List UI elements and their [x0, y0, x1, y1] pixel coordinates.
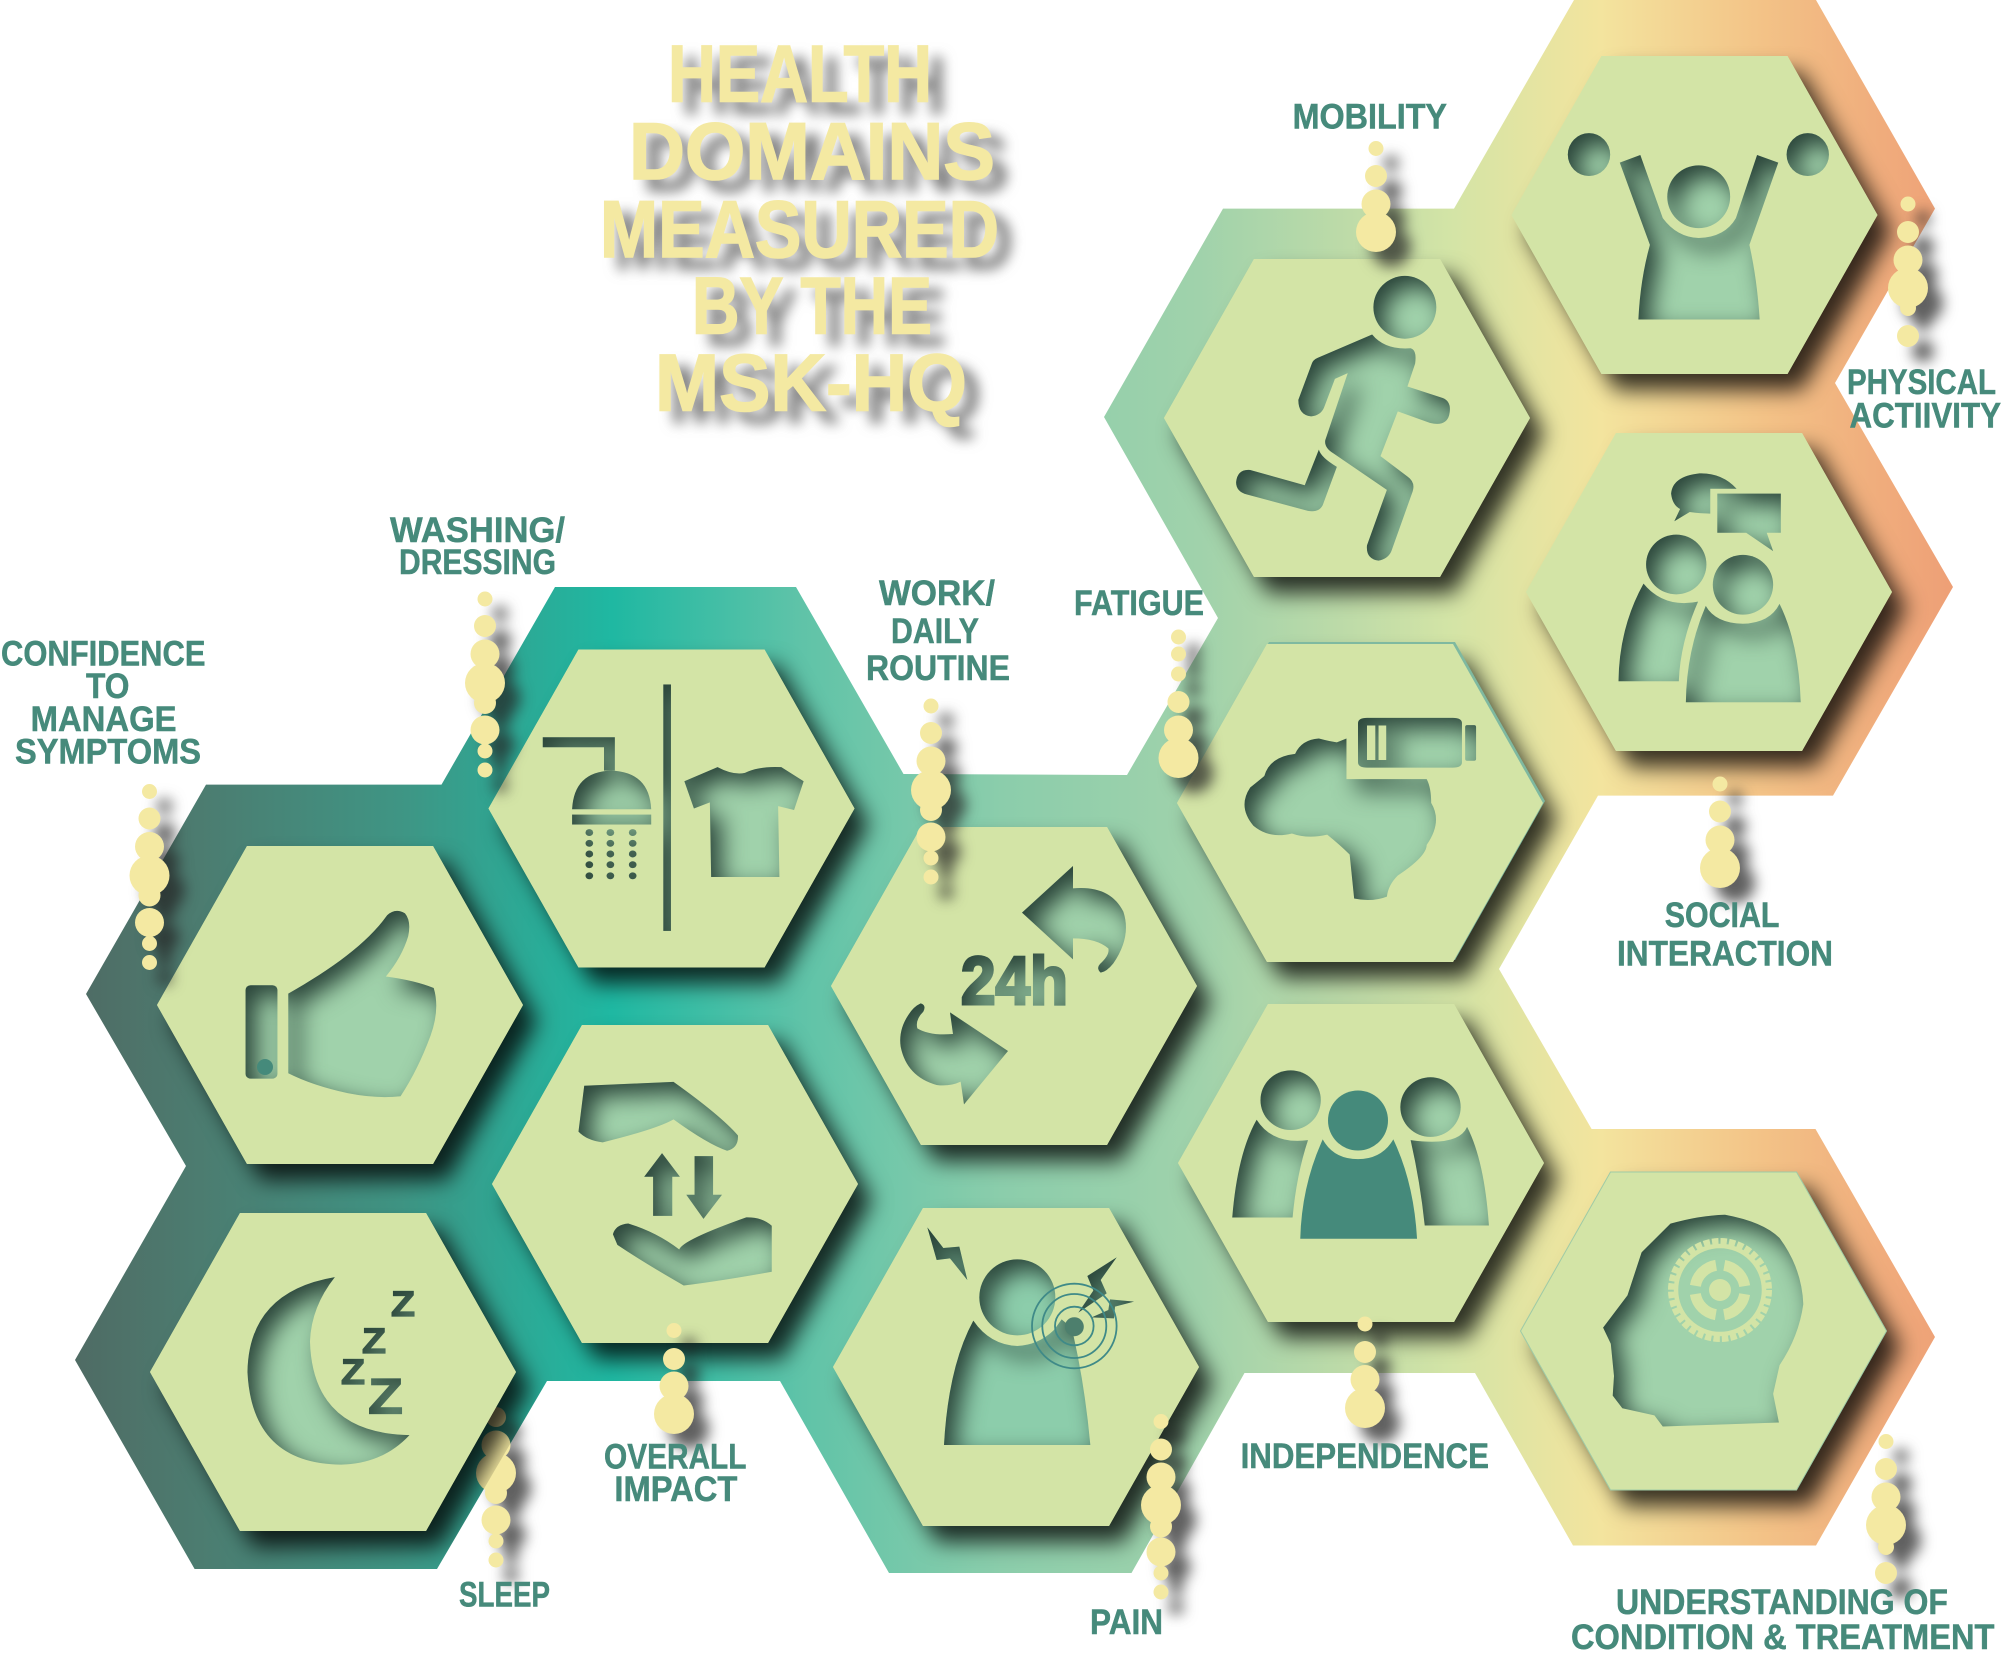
label: sleep: SLEEP: [459, 1576, 550, 1615]
panel: physical activity hexagon: [1512, 56, 1878, 374]
pebble trail: mobility: [1356, 141, 1396, 252]
label: work/daily routine: [866, 574, 1010, 688]
pebble trail: work: [911, 698, 951, 884]
label: confidence to manage symptoms: [1, 634, 206, 772]
icon: moon and zzz: [247, 1277, 415, 1465]
label: social interaction: SOCIAL: [1665, 896, 1780, 935]
title: HEALTH: [668, 30, 932, 120]
panel: work and daily routine hexagon: [831, 827, 1197, 1145]
panel: social interaction hexagon: [1526, 433, 1892, 751]
label: confidence to manage symptoms: TO: [86, 667, 130, 706]
panel: pain hexagon: [833, 1208, 1199, 1526]
panel: washing and dressing hexagon: [488, 650, 854, 968]
title: MSK-HQ: [655, 339, 967, 429]
pebble trail: overall impact: [654, 1323, 694, 1434]
label: social interaction: [1617, 896, 1833, 974]
icon: running person: [1236, 276, 1450, 561]
pebble trail: washing: [465, 592, 505, 778]
label: physical activity: [1847, 363, 2001, 436]
title: [600, 30, 999, 429]
label: work/daily routine: WORK/: [879, 574, 995, 613]
icon: 24h cycle arrows: 24h: [961, 943, 1068, 1019]
label: overall impact: OVERALL: [604, 1438, 746, 1477]
pebble trail: independence: [1345, 1316, 1385, 1428]
pebble trail: confidence: [130, 784, 170, 970]
label: overall impact: IMPACT: [614, 1470, 737, 1509]
pebble trail: pain: [1141, 1414, 1181, 1600]
label: mobility: MOBILITY: [1293, 98, 1447, 137]
icon: hands with up and down arrows: [578, 1082, 772, 1285]
panel: independence hexagon: [1178, 1004, 1544, 1322]
icon: head with gear: [1603, 1215, 1803, 1427]
label: independence: INDEPENDENCE: [1241, 1437, 1489, 1476]
label: work/daily routine: DAILY: [891, 612, 979, 651]
label: understanding of condition and treatment: UNDERSTANDING OF: [1616, 1583, 1948, 1622]
icon: two people talking: [1619, 473, 1801, 702]
icon: brain with low battery: [1245, 718, 1476, 900]
icon: 24h cycle arrows: [900, 866, 1126, 1104]
panel: sleep hexagon: [150, 1213, 516, 1531]
icon: moon and zzz: Z: [391, 1285, 415, 1324]
panel: fatigue hexagon: [1177, 642, 1545, 962]
label: confidence to manage symptoms: MANAGE: [31, 700, 177, 739]
pebble trail: fatigue: [1158, 630, 1198, 778]
label: overall impact: [604, 1438, 746, 1509]
label: social interaction: INTERACTION: [1617, 934, 1833, 974]
title: DOMAINS: [629, 107, 995, 197]
icon: three people: [1232, 1070, 1489, 1239]
title: BY THE: [692, 262, 932, 352]
label: pain: PAIN: [1090, 1603, 1163, 1642]
pebble trail: social interaction: [1700, 776, 1740, 888]
icon: person with pain target: [927, 1227, 1134, 1445]
panel: understanding of condition and treatment hexagon: [1520, 1172, 1886, 1490]
pebble trail: sleep: [476, 1407, 516, 1568]
icon: moon and zzz: Z: [368, 1368, 403, 1424]
panel: overall impact hexagon: [492, 1025, 858, 1343]
hexagon drop shadows: [150, 56, 1892, 1531]
pebble trail: physical activity: [1888, 196, 1928, 347]
label: confidence to manage symptoms: SYMPTOMS: [15, 732, 201, 772]
title: MEASURED: [600, 185, 999, 275]
label: washing/dressing: DRESSING: [399, 543, 556, 582]
icon: thumbs up: [246, 911, 436, 1097]
panel: mobility hexagon: [1164, 259, 1530, 577]
label: washing/dressing: [390, 511, 565, 582]
label: work/daily routine: ROUTINE: [866, 649, 1010, 688]
label: confidence to manage symptoms: CONFIDENCE: [1, 634, 206, 674]
panel: confidence to manage symptoms hexagon: [157, 846, 523, 1164]
label: fatigue: FATIGUE: [1074, 584, 1204, 623]
icon: shower and t-shirt: [543, 684, 804, 931]
icon: moon and zzz: Z: [362, 1322, 386, 1361]
label: washing/dressing: WASHING/: [390, 511, 565, 550]
label: understanding of condition and treatment: [1571, 1583, 1994, 1657]
icon: person lifting weights: [1568, 133, 1829, 320]
pebble trail: understanding: [1866, 1434, 1906, 1584]
icon: moon and zzz: Z: [341, 1353, 365, 1392]
